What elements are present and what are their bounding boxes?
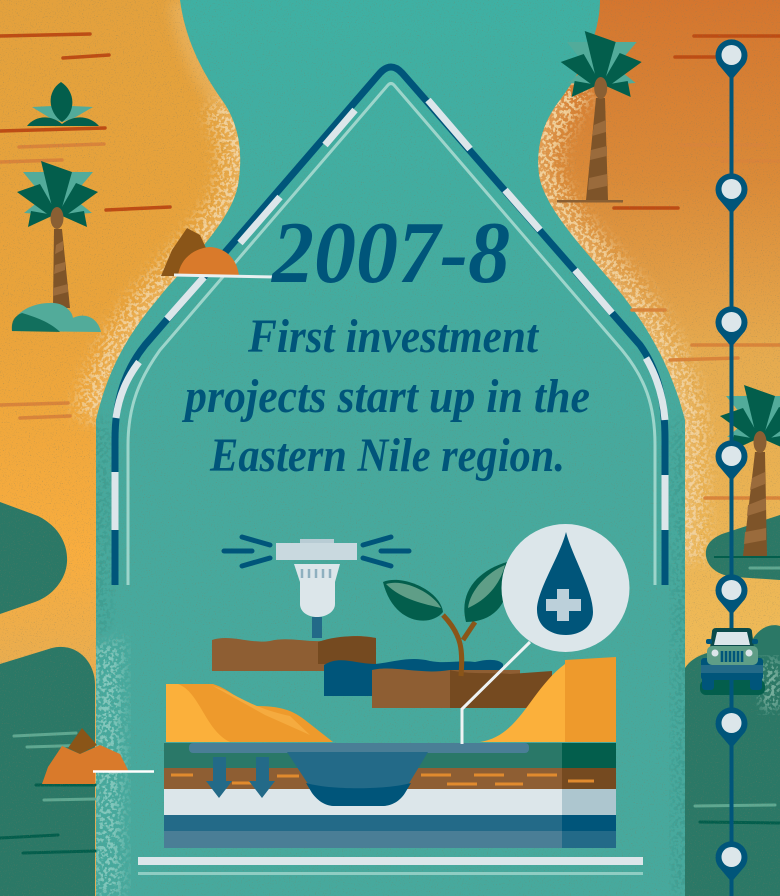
icon: lower-right palm tree (714, 385, 780, 558)
line 1: First investment (247, 310, 540, 363)
title: 2007-8 (270, 205, 510, 302)
icon: water drop callout (502, 524, 630, 652)
arch frame (115, 67, 665, 585)
text block: description (181, 310, 590, 482)
arrow 2 (249, 757, 275, 798)
pin 2 (716, 173, 748, 214)
icon: left palm tree (12, 161, 101, 332)
arch inner line (128, 84, 655, 585)
icon: bush beside jeep (748, 625, 780, 710)
panel: teal edge shading (90, 420, 690, 896)
line 2: projects start up in the (181, 370, 590, 423)
pin 4 (716, 440, 748, 481)
lower soil block (372, 669, 552, 708)
arch outline (115, 67, 665, 585)
panel: right sand (538, 0, 780, 668)
jeep shadow (700, 680, 765, 695)
bottom double rule (138, 857, 643, 875)
icon: small plant (27, 82, 99, 126)
water block (324, 659, 503, 696)
hills: right green (685, 515, 780, 896)
ground layers (164, 743, 616, 848)
pin 1 (716, 39, 748, 80)
pin 6 (716, 707, 748, 748)
arch white segments (115, 100, 665, 530)
upper left soil block (212, 636, 376, 671)
left sand dune (166, 684, 333, 742)
right sand dune (480, 657, 616, 742)
pin 5 (716, 574, 748, 615)
pin 7 (716, 841, 748, 882)
rock: lower left (42, 728, 154, 784)
diagram: irrigation cross-section (164, 636, 616, 848)
panel: left sand (0, 0, 240, 896)
arrow 1 (206, 757, 232, 798)
icon: jeep (701, 628, 763, 690)
pin 3 (716, 306, 748, 347)
icon: top-right palm tree (557, 31, 642, 202)
hills: left green (0, 502, 95, 896)
timeline with pins (716, 39, 748, 896)
icon: seedling (383, 562, 509, 676)
water channel (189, 743, 529, 806)
line 3: Eastern Nile region. (209, 429, 565, 482)
icon: sprinkler (224, 537, 409, 638)
pointer line (462, 642, 530, 744)
rock: upper left (161, 228, 275, 277)
